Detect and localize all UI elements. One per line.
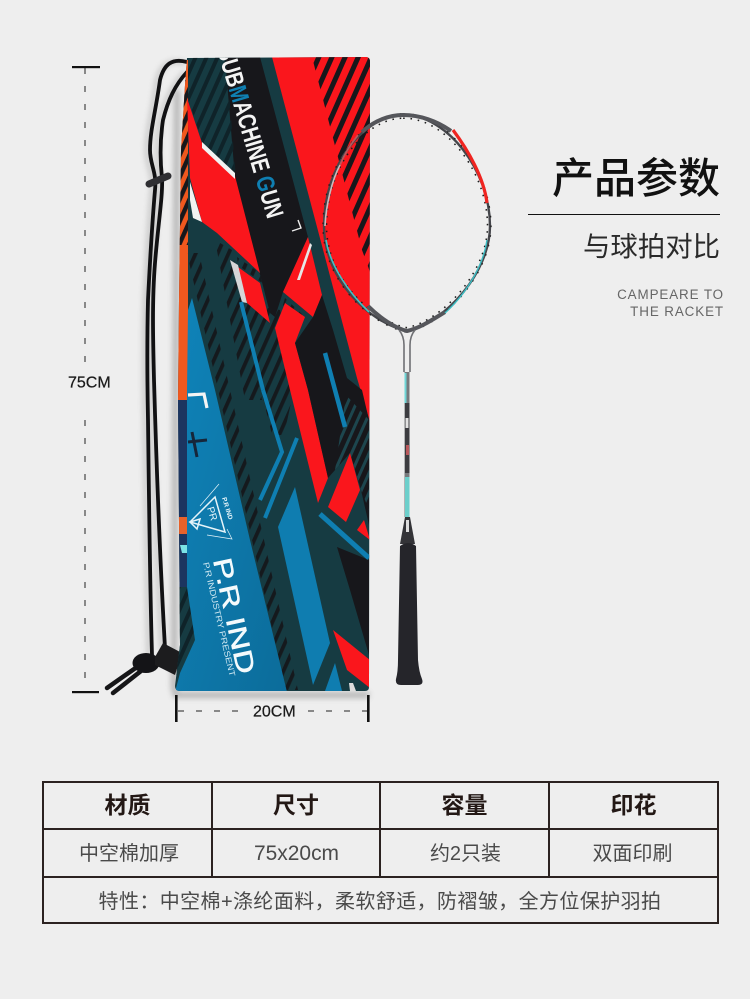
subtitle: 与球拍对比 bbox=[583, 231, 720, 262]
racket bbox=[323, 114, 491, 517]
racket shaft bbox=[399, 330, 415, 517]
table header bbox=[104, 792, 656, 818]
cord ends bbox=[107, 667, 141, 693]
spec table bbox=[43, 782, 718, 923]
lower right red bbox=[328, 453, 360, 522]
table header: 印花 bbox=[610, 792, 656, 818]
table values: 中空棉加厚 bbox=[79, 842, 179, 865]
corner mark bbox=[292, 220, 301, 231]
english subtitle: CAMPEARE TO bbox=[617, 287, 724, 302]
table header: 材质 bbox=[104, 792, 150, 818]
racket handle bbox=[396, 517, 422, 685]
blue lines bbox=[241, 302, 369, 558]
english subtitle: THE RACKET bbox=[630, 304, 724, 319]
triangle logo: P.R IND bbox=[220, 497, 234, 521]
racket head frame bbox=[323, 114, 491, 332]
cord stopper bbox=[149, 176, 168, 184]
table values bbox=[79, 842, 672, 865]
dashed stripe bands bbox=[187, 253, 298, 690]
triangle logo bbox=[190, 484, 234, 539]
english subtitle bbox=[617, 287, 724, 319]
brand wordmark: P.R IND bbox=[207, 555, 261, 677]
product name: SUBMACHINE GUN bbox=[211, 44, 289, 221]
table features: 特性：中空棉+涤纶面料，柔软舒适，防褶皱，全方位保护羽拍 bbox=[99, 890, 661, 913]
height label: 75CM bbox=[68, 374, 111, 392]
title: 产品参数 bbox=[552, 155, 720, 202]
black band bbox=[225, 57, 308, 317]
drawstring cord bbox=[107, 61, 187, 693]
big blue panels bbox=[278, 487, 330, 685]
drawstring bag bbox=[170, 44, 375, 695]
table values: 双面印刷 bbox=[592, 842, 672, 865]
table header: 尺寸 bbox=[273, 792, 319, 818]
triangle logo: PR bbox=[204, 506, 219, 522]
middle red shapes bbox=[238, 267, 270, 323]
table header: 容量 bbox=[442, 792, 488, 818]
left orange strip bbox=[178, 60, 188, 400]
table values: 约2只装 bbox=[430, 842, 501, 865]
white corner mark bbox=[188, 394, 207, 408]
bag shadow bbox=[174, 90, 369, 695]
main blue panel bbox=[175, 298, 287, 692]
width label: 20CM bbox=[253, 704, 296, 720]
table values: 75x20cm bbox=[254, 842, 339, 865]
cord knot bbox=[132, 643, 182, 675]
dark cross bbox=[188, 432, 207, 457]
brand tagline: P.R INDUSTRY PRESENT bbox=[201, 561, 238, 677]
left red shape bbox=[187, 98, 260, 273]
black lower blocks bbox=[295, 295, 369, 525]
right red band bbox=[272, 57, 370, 422]
